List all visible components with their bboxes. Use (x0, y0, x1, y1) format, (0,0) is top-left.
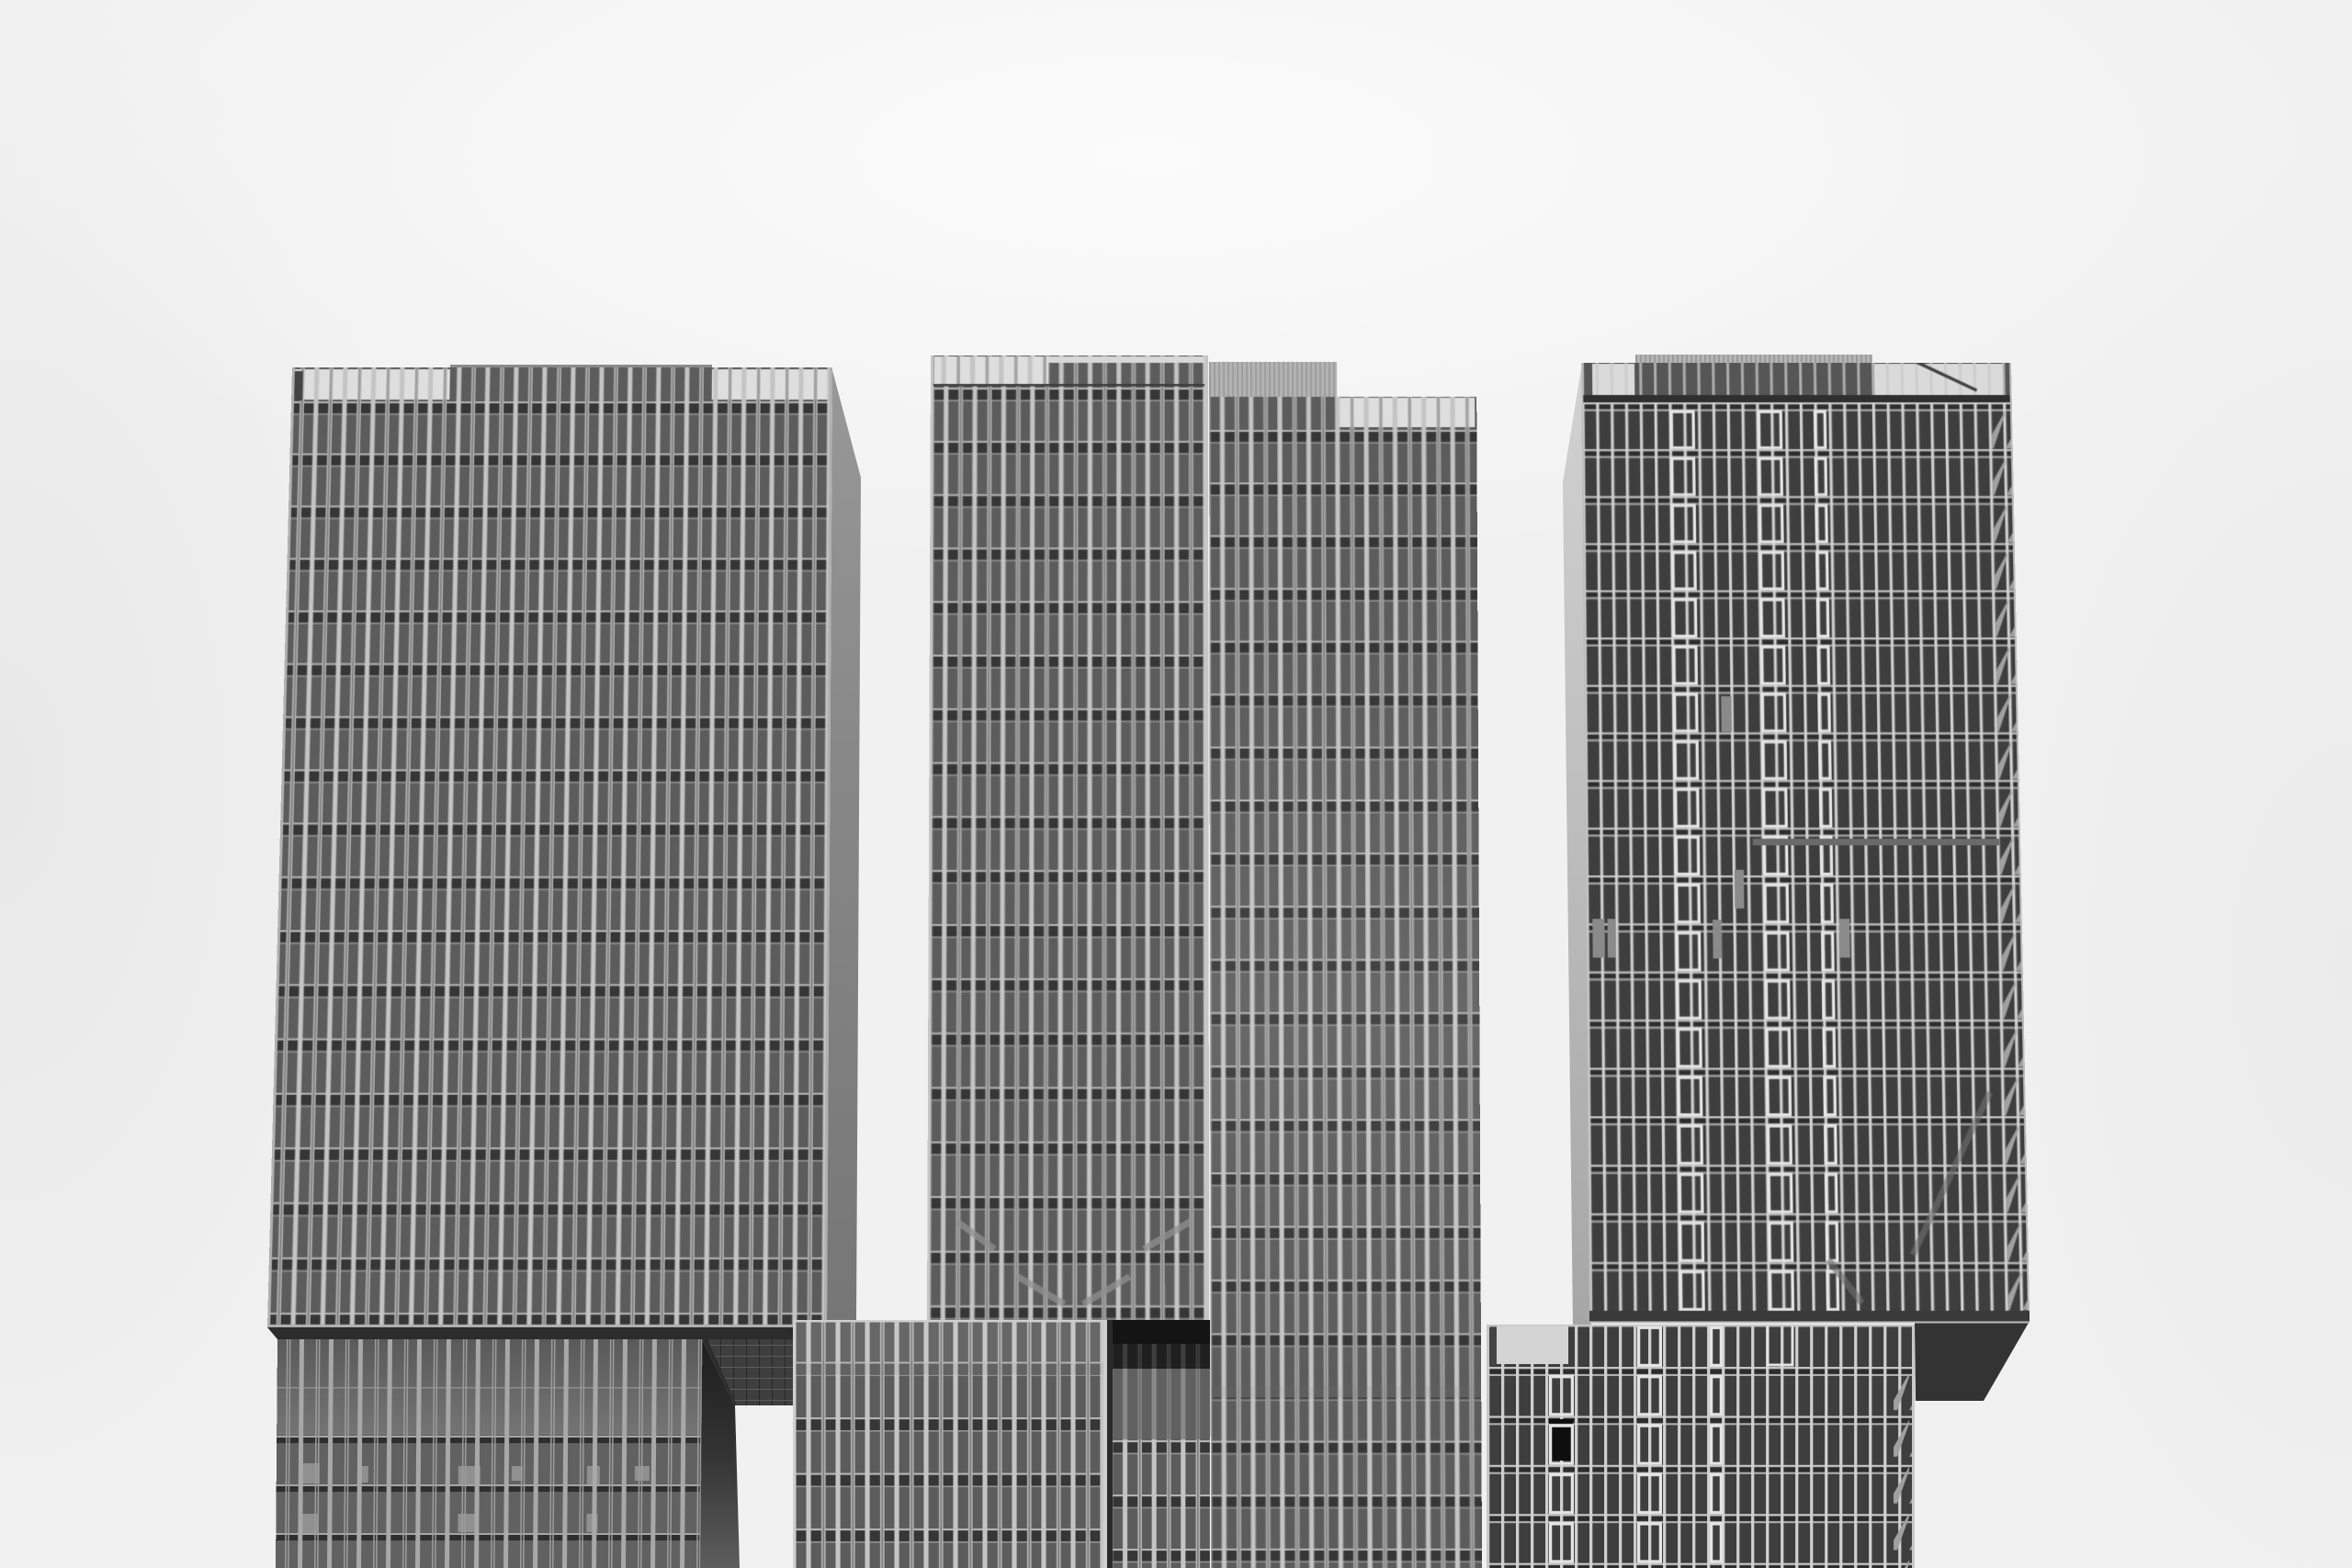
facade grid (927, 355, 1209, 1320)
white window frames (1549, 1325, 1723, 1568)
centre-left tower front facade (927, 355, 1209, 1320)
facade grid (1487, 1325, 1915, 1568)
mid-height lighter band (1209, 638, 1481, 1384)
facade grid (1581, 363, 2030, 1324)
mullions (276, 1339, 702, 1568)
light roof panel (1337, 398, 1475, 427)
light roof panels (291, 369, 832, 400)
right tower underside (1915, 1323, 2029, 1401)
roof band (1581, 363, 2012, 402)
roof dark edge (931, 384, 1208, 387)
lower right block (1487, 1325, 1915, 1568)
facade grid (267, 367, 832, 1327)
dark open window (1549, 1419, 1573, 1461)
dark spandrels (276, 1438, 701, 1540)
facade grid (1209, 397, 1482, 1568)
white window frames (1669, 402, 1839, 1311)
top window tint (793, 1323, 1107, 1361)
dark recessed niche (1107, 1320, 1210, 1568)
lobby glass (1107, 1369, 1210, 1439)
floor lines (276, 1387, 702, 1535)
left tower side face (827, 370, 861, 1327)
left tower rooftop step (450, 365, 712, 370)
rooftop equipment (1489, 1328, 1497, 1365)
floor without spandrel (1211, 1386, 1481, 1398)
lit window patches (1590, 696, 1850, 959)
reflections on right column (1991, 402, 2030, 1311)
frame (1487, 1325, 1915, 1568)
centre-right tower facade (1209, 362, 1482, 1568)
left tower underside (267, 1327, 793, 1405)
lit window patches (300, 1463, 650, 1538)
left lower block facade (276, 1339, 702, 1568)
right tower front facade (1581, 363, 2030, 1323)
large diagonal reflections near base (1826, 1092, 1994, 1303)
light roof panel (1497, 1325, 1568, 1364)
interior ceiling strip (1753, 839, 1999, 845)
roof plant (1209, 362, 1337, 397)
left tower front facade (267, 367, 832, 1327)
diagonal bracing reflection (957, 1222, 1191, 1304)
floor without spandrel (793, 1363, 1107, 1374)
black soffit (1107, 1320, 1210, 1344)
lower centre-left block (793, 1320, 1107, 1568)
frame (793, 1320, 1107, 1568)
upper floor window frame (1768, 1325, 1792, 1365)
edge frames (1581, 363, 2030, 1324)
light roof panels (934, 356, 1204, 384)
left lower block side face (698, 1339, 740, 1568)
base glass (276, 1339, 702, 1568)
rooftop equipment (293, 371, 303, 400)
facade grid (793, 1320, 1107, 1568)
shadow edge (1107, 1320, 1113, 1568)
right tower side face (1563, 363, 1591, 1327)
dark bars (1107, 1344, 1210, 1369)
glass floors (1107, 1320, 1210, 1568)
right tower rooftop unit (1635, 355, 1872, 364)
rooftop crane (1905, 356, 1977, 390)
edge frames (927, 355, 1209, 1320)
upper glazed floors (277, 1339, 702, 1435)
edge frames (267, 367, 832, 1327)
reflections at right column (1894, 1367, 1915, 1568)
